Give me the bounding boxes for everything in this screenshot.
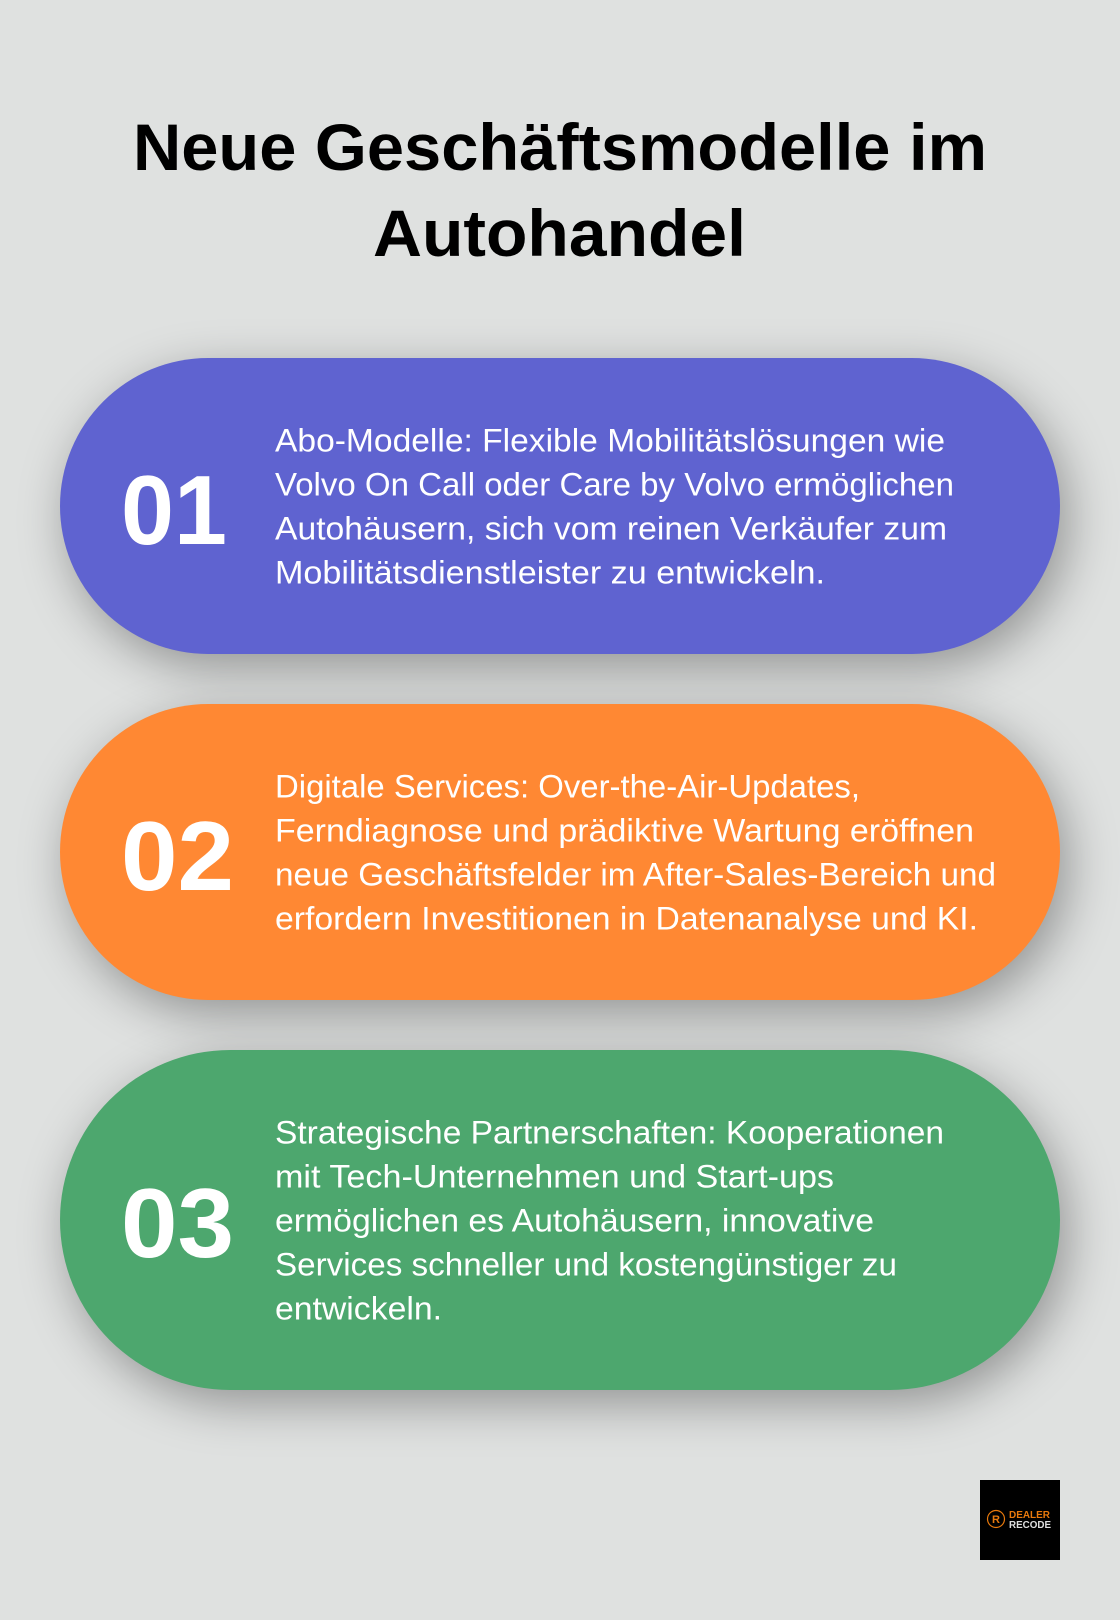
logo: Dealer Recode: RECODE	[1009, 1520, 1051, 1531]
text block 01: Autohäusern, sich vom reinen Verkäufer zum	[275, 510, 947, 546]
pill background 01	[60, 358, 1060, 654]
pill background 03	[60, 1050, 1060, 1390]
text block 03: entwickeln.	[275, 1290, 442, 1326]
panel: Strategische Partnerschaften	[60, 1050, 1060, 1390]
text block 02: neue Geschäftsfelder im After-Sales-Bereich und	[275, 856, 996, 892]
text block 03: Services schneller und kostengünstiger zu	[275, 1246, 897, 1282]
text block 03: mit Tech-Unternehmen und Start-ups	[275, 1158, 834, 1194]
text block 03: Strategische Partnerschaften: Kooperationen	[275, 1114, 944, 1150]
text block 02: Digitale Services: Over-the-Air-Updates,	[275, 768, 860, 804]
text block 01: Mobilitätsdienstleister zu entwickeln.	[275, 554, 825, 590]
panel: Digitale Services	[60, 704, 1060, 1000]
text block 02	[275, 768, 996, 936]
text block 01: Abo-Modelle: Flexible Mobilitätslösungen wie	[275, 422, 945, 458]
text block 03	[275, 1114, 944, 1326]
pill background 02	[60, 704, 1060, 1000]
number 02: 02	[121, 801, 234, 911]
number 01: 01	[121, 455, 227, 565]
logo: Dealer Recode: DEALER	[1009, 1510, 1051, 1521]
panel: Abo-Modelle	[60, 358, 1060, 654]
number 03: 03	[121, 1168, 234, 1278]
text block 03: ermöglichen es Autohäusern, innovative	[275, 1202, 874, 1238]
title: Neue Geschäftsmodelle im	[133, 110, 987, 184]
text block 01: Volvo On Call oder Care by Volvo ermöglichen	[275, 466, 954, 502]
text block 02: erfordern Investitionen in Datenanalyse und KI.	[275, 900, 978, 936]
title: Autohandel	[373, 196, 746, 270]
logo: Dealer Recode	[980, 1480, 1060, 1560]
text block 02: Ferndiagnose und prädiktive Wartung eröffnen	[275, 812, 974, 848]
title	[133, 110, 987, 270]
logo: Dealer Recode: R	[992, 1514, 1000, 1526]
text block 01	[275, 422, 954, 590]
